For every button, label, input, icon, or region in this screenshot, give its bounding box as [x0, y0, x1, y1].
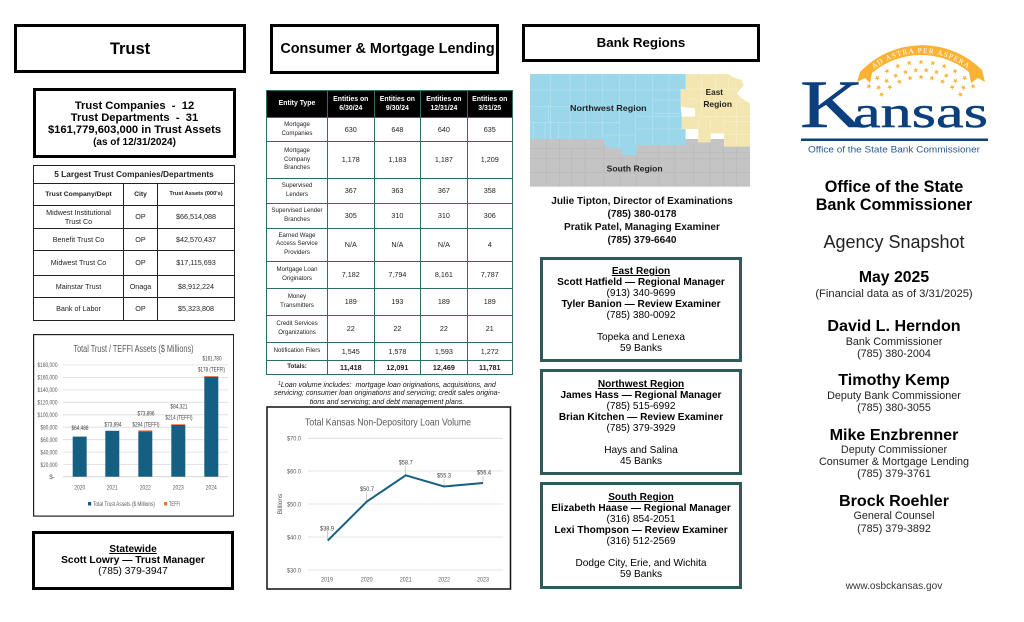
- table: entity counts: N/A: [391, 240, 403, 249]
- panel: Northwest Region: 45 Banks: [620, 456, 662, 467]
- text block: examinations contacts: Julie Tipton, Director of Examinations: [551, 196, 733, 207]
- table: entity counts: 635: [484, 125, 496, 134]
- table: entity counts: Providers: [284, 249, 310, 256]
- data line: [328, 475, 483, 541]
- motto: AD ASTRA PER ASPERA: [872, 48, 968, 69]
- table: 5 largest trust companies: OP: [135, 304, 146, 313]
- data labels: $58.7: [399, 460, 413, 466]
- table: entity counts: Transmitters: [280, 302, 314, 309]
- y axis labels: $80,000: [40, 424, 58, 431]
- table: 5 largest trust companies: Mainstar Trust: [56, 282, 101, 291]
- table: entity counts: Mortgage: [284, 147, 310, 154]
- person: Timothy Kemp: Timothy Kemp: [838, 371, 950, 389]
- table: entity counts: 6/30/24: [339, 105, 362, 112]
- person: David L. Herndon: [827, 317, 961, 360]
- panel: statewide trust contact: Scott Lowry — Trust Manager: [61, 555, 205, 566]
- table: entity counts: 21: [486, 324, 494, 333]
- table: 5 largest trust companies: Trust Company/Dept: [45, 190, 112, 198]
- bar chart: total trust / TEFFI assets: [33, 334, 234, 517]
- data labels: $50.7: [360, 486, 374, 493]
- y axis labels: $50.0: [287, 502, 301, 508]
- table: entity counts: Entities on: [380, 96, 415, 102]
- table: entity counts: 1,272: [481, 347, 499, 356]
- table: entity counts: 189: [438, 297, 450, 306]
- panel: East Region: Tyler Banion — Review Examiner: [561, 299, 721, 310]
- bars: [73, 377, 218, 477]
- panel: South Region: (316) 512-2569: [606, 536, 676, 547]
- map labels: [570, 87, 732, 173]
- table: 5 largest trust companies: $66,514,088: [176, 212, 216, 221]
- data labels: $55.3: [437, 472, 451, 480]
- person: Brock Roehler: Brock Roehler: [839, 492, 949, 510]
- panel: statewide trust contact: Statewide: [109, 544, 157, 554]
- table: entity counts: 7,182: [342, 270, 360, 279]
- table: entity counts: 22: [440, 324, 448, 333]
- table: entity counts: 640: [438, 125, 450, 134]
- financial data date: (Financial data as of 3/31/2025): [815, 288, 973, 300]
- x axis labels: 2023: [173, 484, 184, 492]
- data labels: $38.9: [320, 526, 334, 532]
- table: entity counts: Branches: [284, 164, 310, 171]
- y axis labels: $70.0: [287, 436, 301, 442]
- y axis labels: [38, 362, 58, 481]
- table: entity counts: 3/31/25: [478, 105, 501, 112]
- y axis labels: $120,000: [38, 400, 58, 406]
- table: entity counts: 11,781: [479, 363, 501, 372]
- footnote: loan volume: 1Loan volume includes: mortgage loan originations, acquisitions, and: [278, 380, 496, 388]
- heading: Bank Regions: [522, 24, 760, 62]
- table: 5 largest trust companies: $8,912,224: [178, 282, 214, 291]
- table: entity counts: N/A: [345, 240, 357, 249]
- east region: [681, 74, 750, 147]
- data labels: $56.4: [477, 470, 491, 476]
- date: May 2025: [859, 269, 929, 286]
- ribbon: [857, 45, 985, 83]
- table: entity counts: 306: [484, 211, 496, 220]
- person: Timothy Kemp: (785) 380-3055: [857, 402, 931, 414]
- heading: Bank Regions: Bank Regions: [597, 35, 685, 50]
- table: entity counts: Originators: [282, 275, 312, 282]
- y axis labels: $20,000: [40, 462, 58, 469]
- table: entity counts: Earned Wage: [278, 232, 316, 239]
- table: entity counts: Company: [284, 156, 310, 163]
- footnote: loan volume: [274, 380, 500, 406]
- bar value labels: $64,488: [72, 425, 89, 432]
- y axis labels: $-: [49, 474, 55, 481]
- line chart: total Kansas non-depository loan volume: [266, 406, 512, 590]
- y axis labels: $40,000: [40, 449, 58, 456]
- table: 5 largest trust companies: Trust Co: [65, 217, 92, 226]
- panel: South Region: 59 Banks: [620, 569, 662, 580]
- heading: Trust: [14, 24, 246, 73]
- table: entity counts: Supervised: [282, 182, 312, 189]
- panel: South Region: Dodge City, Erie, and Wichita: [575, 558, 707, 569]
- tagline: Office of the State Bank Commissioner: [808, 144, 980, 154]
- table: 5 largest trust companies: OP: [135, 212, 146, 221]
- table: entity counts: Notification Filers: [274, 347, 320, 354]
- table: entity counts: 1,209: [481, 155, 499, 164]
- bar value labels: $294 (TEFFI): [132, 422, 160, 428]
- table: entity counts: 9/30/24: [386, 105, 409, 112]
- footnote: loan volume: tions and servicing; and debt management plans.: [310, 398, 464, 406]
- text block: examinations contacts: Pratik Patel, Managing Examiner: [564, 222, 720, 233]
- panel: East Region: [540, 257, 742, 362]
- text block: examinations contacts: (785) 380-0178: [607, 209, 677, 220]
- rule: [801, 138, 988, 141]
- table: entity counts: Mortgage: [284, 121, 310, 128]
- person: Mike Enzbrenner: Mike Enzbrenner: [830, 426, 958, 444]
- person: Brock Roehler: General Counsel: [853, 510, 935, 522]
- panel: South Region: Lexi Thompson — Review Examiner: [554, 525, 728, 536]
- logo: Kansas OSBC: [800, 45, 988, 154]
- panel: South Region: Elizabeth Haase — Regional Manager: [551, 503, 731, 514]
- table: entity counts: 310: [438, 211, 450, 220]
- y axis labels: $140,000: [38, 387, 58, 394]
- wordmark K: K: [800, 66, 864, 142]
- data labels: [320, 460, 491, 532]
- person: David L. Herndon: Bank Commissioner: [846, 336, 942, 348]
- panel: trust summary: $161,779,603,000 in Trust Assets: [48, 124, 221, 136]
- table: entity counts: 305: [345, 211, 357, 220]
- map labels: South Region: [607, 163, 663, 173]
- y axis labels: $40.0: [287, 534, 301, 542]
- map labels: Region: [703, 99, 732, 109]
- y axis labels: $60.0: [287, 468, 301, 476]
- map: Kansas bank regions: [530, 74, 750, 187]
- table: entity counts: Branches: [284, 216, 310, 223]
- website: www.osbckansas.gov: [846, 581, 942, 592]
- footnote: loan volume: servicing; consumer loan originations and servicing; credit sales origina-: [274, 389, 500, 397]
- table: entity counts: Organizations: [278, 329, 316, 336]
- table: entity counts: 189: [345, 297, 357, 306]
- table: entity counts: 22: [393, 324, 401, 333]
- panel: trust summary: [33, 88, 236, 158]
- table: entity counts: 7,794: [388, 270, 406, 279]
- table: entity counts: 1,593: [435, 347, 453, 356]
- panel: East Region: East Region: [612, 266, 670, 277]
- y axis title: Billions: [277, 493, 284, 514]
- table: 5 largest trust companies: Midwest Trust Co: [51, 258, 106, 267]
- table: entity counts: 648: [391, 125, 403, 134]
- person: Mike Enzbrenner: Deputy Commissioner: [841, 444, 947, 456]
- x axis labels: [321, 576, 489, 584]
- table: 5 largest trust companies: OP: [135, 258, 146, 267]
- y axis labels: $30.0: [287, 568, 301, 574]
- legend: TEFFI: [169, 501, 180, 508]
- TEFFI segments: [138, 376, 218, 432]
- table: 5 largest trust companies: 5 Largest Trust Companies/Departments: [54, 168, 214, 178]
- person: David L. Herndon: David L. Herndon: [827, 317, 961, 335]
- panel: trust summary: (as of 12/31/2024): [93, 136, 176, 148]
- panel: South Region: [540, 482, 742, 589]
- x axis labels: 2021: [400, 576, 412, 584]
- table: entity counts: Entities on: [472, 96, 507, 102]
- subtitle: Agency Snapshot: Agency Snapshot: [823, 232, 965, 252]
- panel: East Region: Topeka and Lenexa: [597, 332, 685, 343]
- panel: Northwest Region: Hays and Salina: [604, 445, 678, 456]
- table: entity counts: 1,183: [388, 155, 406, 164]
- title: office name: Office of the State: [825, 178, 963, 196]
- table: entity counts: Supervised Lender: [271, 207, 323, 214]
- heading: Consumer & Mortgage Lending: [270, 24, 499, 74]
- table: entity counts: Entities on: [333, 96, 368, 102]
- person: Timothy Kemp: Deputy Bank Commissioner: [827, 390, 961, 402]
- south region: [530, 139, 750, 187]
- panel: trust summary: Trust Departments - 31: [71, 112, 198, 124]
- table: 5 largest trust companies: $17,115,693: [176, 258, 216, 267]
- y axis labels: $60,000: [40, 437, 58, 444]
- person: David L. Herndon: (785) 380-2004: [857, 348, 931, 360]
- panel: Northwest Region: James Hass — Regional Manager: [560, 390, 722, 401]
- person: Brock Roehler: (785) 379-3892: [857, 523, 931, 535]
- wordmark ansas: ansas: [853, 88, 988, 137]
- stars: [865, 59, 977, 98]
- panel: East Region: (913) 340-9699: [606, 288, 676, 299]
- table: entity counts: N/A: [438, 240, 450, 249]
- panel: statewide trust contact: [32, 531, 234, 590]
- table: entity counts: 12,091: [386, 363, 408, 372]
- bar value labels: $161,780: [202, 356, 222, 362]
- person: Mike Enzbrenner: (785) 379-3761: [857, 468, 931, 480]
- x axis labels: 2020: [74, 484, 86, 492]
- table: 5 largest trust companies: $5,323,808: [178, 304, 214, 313]
- panel: South Region: (316) 854-2051: [606, 514, 676, 525]
- table: entity counts: 367: [438, 186, 450, 195]
- panel: Northwest Region: (785) 515-6992: [606, 401, 676, 412]
- heading: Consumer & Mortgage Lending: Consumer & Mortgage Lending: [280, 41, 495, 57]
- bar value labels: $84,321: [170, 404, 188, 410]
- table: 5 largest trust companies: Trust Assets (000's): [169, 190, 223, 196]
- table: entity counts: Entities on: [426, 96, 462, 102]
- text block: examinations contacts: [551, 196, 733, 246]
- table: 5 largest trust companies: $42,570,437: [176, 235, 216, 244]
- table: entity counts: 189: [484, 297, 496, 306]
- table: entity counts: 1,187: [435, 155, 453, 164]
- northwest region: [530, 74, 687, 155]
- table: entity counts: Entity Type: [279, 100, 315, 107]
- table: entity counts: 7,787: [481, 270, 499, 279]
- person: Brock Roehler: [839, 492, 949, 535]
- table: entity counts: 358: [484, 186, 496, 195]
- table: entity counts: 8,161: [435, 270, 453, 279]
- column: agency snapshot directory: [815, 178, 973, 592]
- x axis labels: 2019: [321, 576, 333, 584]
- x axis labels: 2020: [361, 576, 373, 584]
- heading: Trust: Trust: [110, 40, 150, 58]
- y axis labels: $100,000: [38, 412, 58, 419]
- chart title: Total Kansas Non-Depository Loan Volume: [305, 416, 471, 428]
- table: entity counts: Credit Services: [276, 320, 318, 327]
- table: entity counts: Access Service: [276, 240, 318, 247]
- table: 5 largest trust companies: Benefit Trust Co: [53, 235, 104, 244]
- table: entity counts: Lenders: [286, 191, 308, 198]
- map labels: East: [706, 87, 723, 97]
- y axis labels: $160,000: [38, 375, 58, 382]
- table: entity counts: 367: [345, 186, 357, 195]
- map labels: Northwest Region: [570, 103, 647, 113]
- person: Mike Enzbrenner: [819, 426, 969, 480]
- leader lines: [328, 466, 483, 540]
- bar value labels: $73,694: [104, 422, 122, 428]
- panel: East Region: 59 Banks: [620, 343, 662, 354]
- table: entity counts: [266, 90, 513, 375]
- table: 5 largest trust companies: OP: [135, 235, 146, 244]
- x axis labels: 2022: [140, 484, 151, 492]
- legend: Total Trust Assets ($ Millions): [93, 501, 155, 508]
- bar value labels: $214 (TEFFI): [166, 414, 192, 422]
- panel: Northwest Region: [540, 369, 742, 475]
- table: entity counts: 1,578: [388, 347, 406, 356]
- x axis labels: 2024: [206, 484, 217, 492]
- table: entity counts: 4: [488, 240, 492, 249]
- text block: examinations contacts: (785) 379-6640: [607, 235, 677, 246]
- panel: Northwest Region: Northwest Region: [598, 379, 684, 390]
- table: entity counts: 11,418: [340, 363, 362, 372]
- y axis labels: $180,000: [38, 362, 58, 369]
- table: entity counts: Totals:: [287, 363, 307, 370]
- table: entity counts: 630: [345, 125, 357, 134]
- x axis labels: [74, 484, 217, 492]
- table: entity counts: Money: [288, 293, 306, 300]
- table: entity counts: Companies: [282, 130, 312, 137]
- bar value labels: [72, 356, 225, 432]
- x axis labels: 2021: [107, 484, 118, 492]
- y axis labels: [287, 436, 301, 574]
- table: entity counts: 363: [391, 186, 403, 195]
- table: entity counts: 12,469: [433, 363, 455, 372]
- table: entity counts: 193: [391, 297, 403, 306]
- table: entity counts: 22: [347, 324, 355, 333]
- table: entity counts: Mortgage Loan: [276, 266, 318, 273]
- person: Mike Enzbrenner: Consumer & Mortgage Lending: [819, 456, 969, 468]
- table: entity counts: 12/31/24: [430, 105, 457, 112]
- table: 5 largest trust companies: [33, 165, 235, 321]
- table: 5 largest trust companies: Onaga: [130, 282, 151, 291]
- panel: East Region: (785) 380-0092: [606, 310, 676, 321]
- x axis labels: 2023: [477, 576, 489, 584]
- panel: South Region: South Region: [608, 492, 674, 503]
- title: office name line 2: Bank Commissioner: [816, 196, 972, 214]
- panel: Northwest Region: Brian Kitchen — Review Examiner: [559, 412, 723, 423]
- panel: statewide trust contact: (785) 379-3947: [98, 566, 168, 577]
- bar value labels: $73,896: [138, 410, 155, 418]
- table: 5 largest trust companies: City: [134, 190, 147, 198]
- panel: trust summary: Trust Companies - 12: [75, 100, 194, 112]
- person: Timothy Kemp: [827, 371, 961, 414]
- table: 5 largest trust companies: Bank of Labor: [56, 304, 101, 313]
- table: 5 largest trust companies: Midwest Institutional: [46, 208, 111, 216]
- table: entity counts: 1,178: [342, 155, 360, 164]
- table: entity counts: 1,545: [342, 347, 360, 356]
- panel: East Region: Scott Hatfield — Regional Manager: [557, 277, 725, 288]
- x axis labels: 2022: [438, 576, 450, 584]
- table: entity counts: 310: [391, 211, 403, 220]
- panel: Northwest Region: (785) 379-3929: [606, 423, 676, 434]
